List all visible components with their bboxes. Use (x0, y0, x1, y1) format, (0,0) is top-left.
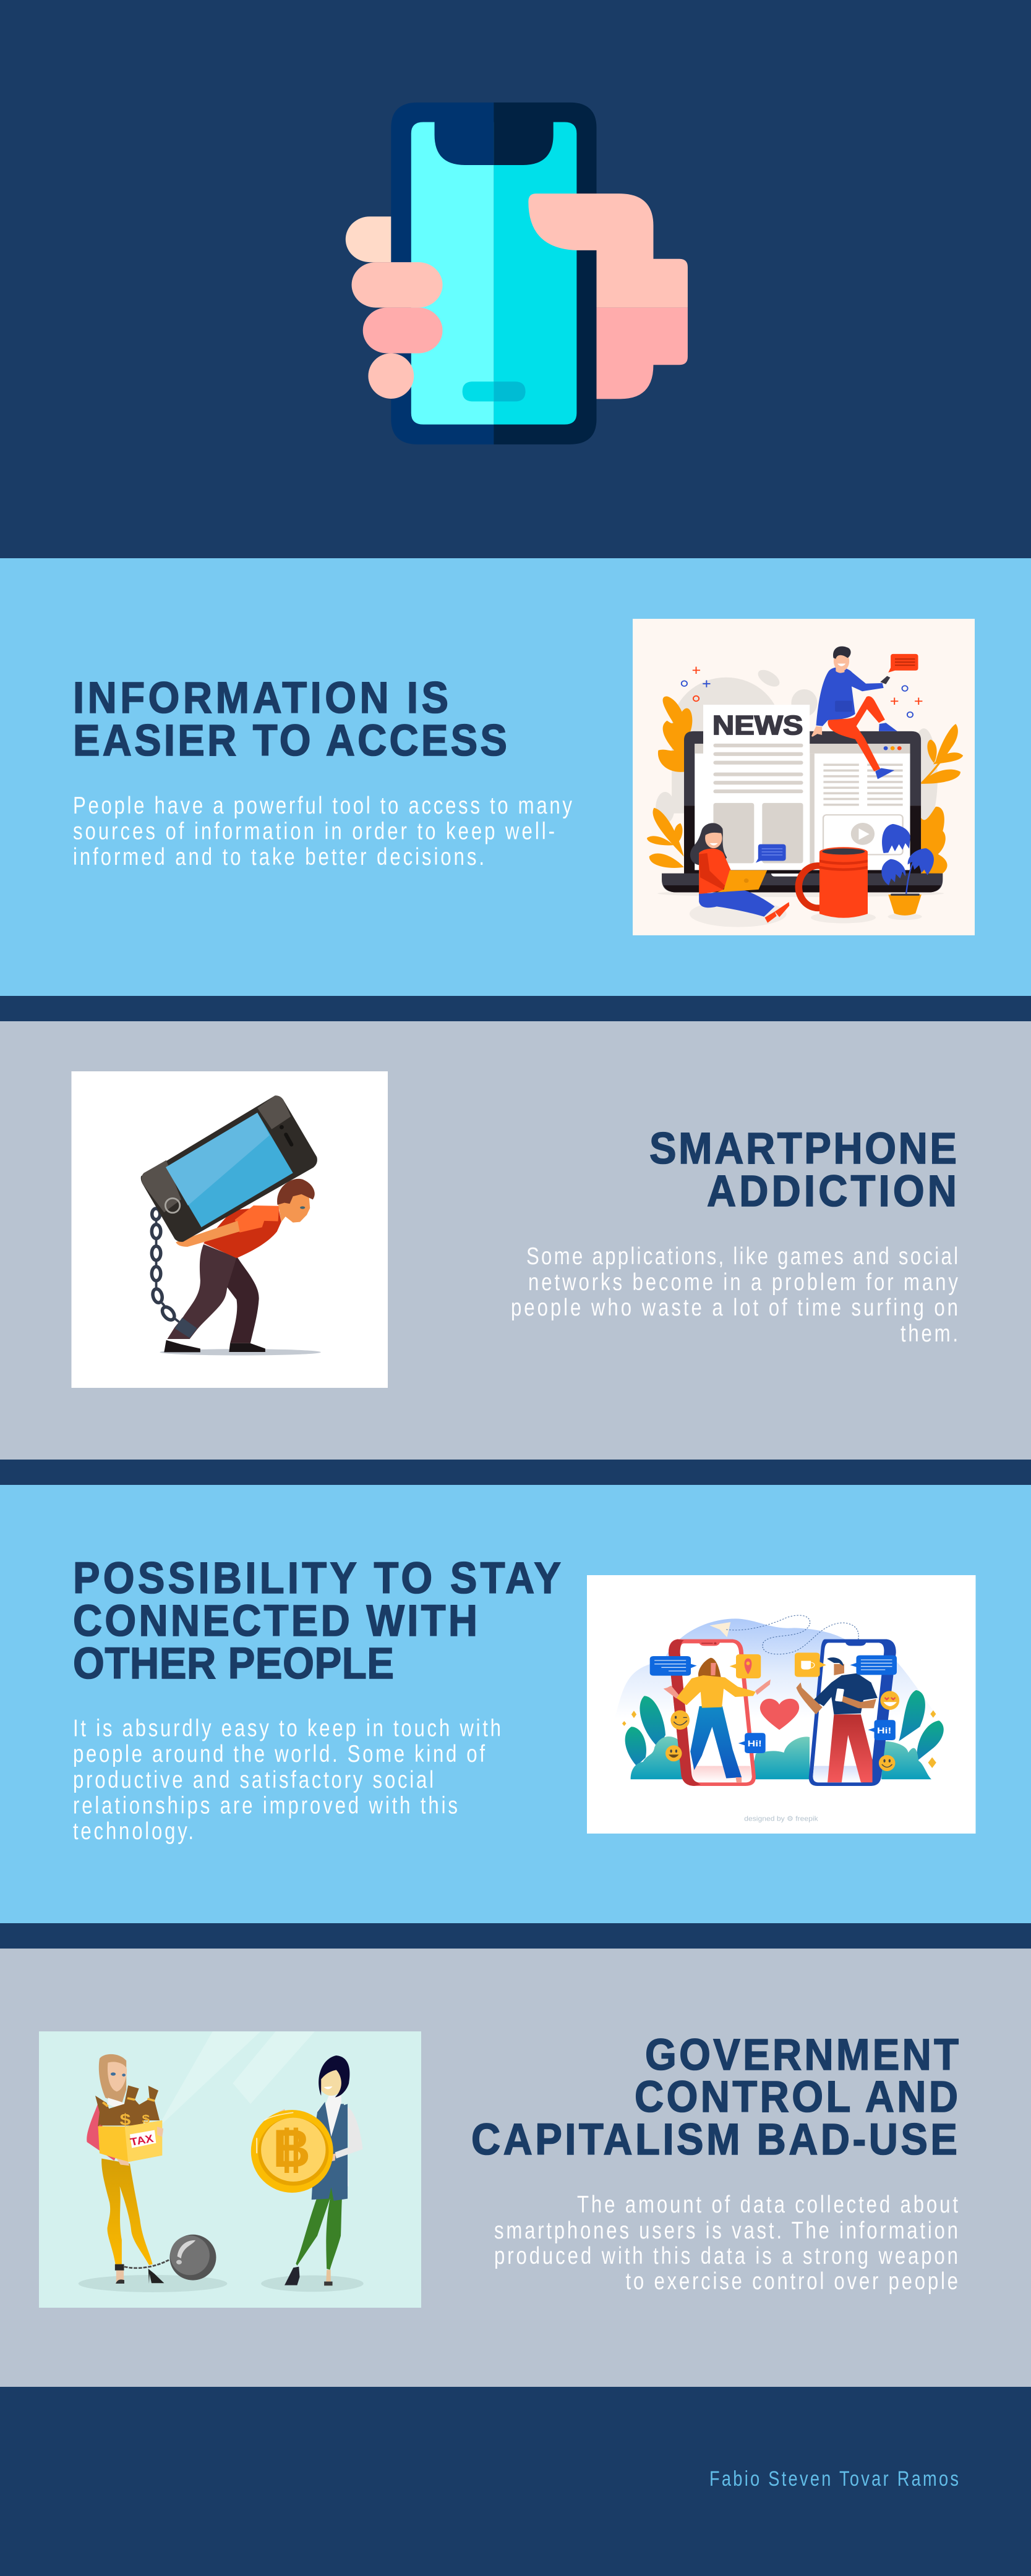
panel: smartphone addiction (0, 1021, 1031, 1460)
notch right (494, 122, 554, 165)
text block: addiction body: people who waste a lot of time surfing on (511, 1294, 958, 1321)
bitcoin coin (251, 2109, 336, 2193)
browser dots (884, 746, 888, 750)
text block: information body: People have a powerful tool to access to many (73, 793, 572, 819)
heading: possibility to stay connected: OTHER PEOPLE (73, 1639, 394, 1688)
heading: government control (471, 2031, 959, 2164)
teal bushes (631, 1736, 931, 1779)
newspaper lines (713, 744, 803, 863)
paper plane (709, 1622, 730, 1637)
heading: information is easier to access: INFORMATION IS (73, 674, 448, 723)
ball and chain (115, 2235, 216, 2281)
text block: information body: sources of information in order to keep well- (73, 818, 555, 844)
arm (176, 1221, 240, 1247)
ground shadows (657, 890, 944, 927)
hi bubbles: Hi! (748, 1739, 762, 1749)
home pill left (463, 381, 494, 401)
thumb and upper palm (528, 193, 688, 308)
woman with tax box: $ (142, 2113, 150, 2125)
woman with tax box (87, 2054, 164, 2284)
woman with tax box: TAX (129, 2133, 155, 2148)
text block: addiction body: Some applications, like games and social (526, 1243, 958, 1270)
illustration card: news (633, 619, 975, 935)
man (796, 1657, 878, 1782)
icon: hand holding smartphone (346, 103, 688, 444)
bitcoin coin: B (273, 2119, 310, 2179)
red phone (669, 1639, 756, 1786)
heading: possibility to stay connected (73, 1554, 561, 1688)
illustration: news on laptop (647, 647, 963, 927)
phone body right half (494, 103, 596, 444)
laptop lid lower (684, 806, 921, 874)
orange leaves (647, 696, 963, 874)
illustration: two people on phones (615, 1615, 944, 1822)
red speech bubble (888, 654, 918, 673)
panel: information access (0, 558, 1031, 996)
text block: information body: informed and to take better decisions. (73, 844, 484, 870)
phone screen left half (411, 122, 494, 425)
light beams (157, 2031, 315, 2128)
text block: connected body: relationships are improved with this (73, 1792, 458, 1819)
little finger (368, 353, 414, 399)
newspaper (703, 705, 810, 869)
chain (152, 1209, 179, 1322)
heading: possibility to stay connected: CONNECTED WITH (73, 1597, 477, 1646)
phone body left half (391, 103, 494, 444)
laptop lid upper (684, 731, 921, 806)
text block: information body (73, 793, 572, 870)
notch left (435, 122, 494, 165)
potted plant (881, 824, 934, 916)
text block: government body: to exercise control over people (626, 2268, 958, 2295)
shoes (164, 1340, 200, 1352)
shadow (160, 1349, 321, 1356)
lower palm (596, 308, 688, 399)
text block: government body: smartphones users is vast. The information (494, 2217, 958, 2244)
video box (823, 815, 903, 854)
woman with tax box: $ (120, 2111, 130, 2129)
heading: smartphone addiction: SMARTPHONE (649, 1124, 957, 1173)
leg cuff (175, 1318, 197, 1338)
location bubble (730, 1654, 761, 1678)
credit: designed by ⚙ freepik (744, 1815, 818, 1822)
ground shadows (79, 2275, 227, 2292)
torso (203, 1206, 281, 1258)
newspaper title: NEWS (712, 710, 803, 741)
neck and head (278, 1191, 310, 1223)
article lines right (823, 763, 903, 806)
text block: connected body (73, 1715, 501, 1845)
hi bubbles (738, 1720, 896, 1753)
laptop base (662, 874, 943, 893)
illustration: tax and bitcoin women (79, 2031, 364, 2292)
blue speech bubble (756, 844, 786, 863)
phone screen right half (494, 122, 576, 425)
ring finger (363, 308, 443, 353)
text block: government body (494, 2191, 958, 2295)
panel: government control (0, 1949, 1031, 2387)
illustration card: connection (587, 1575, 976, 1834)
woman with laptop (690, 823, 789, 923)
heading: information is easier to access (73, 674, 507, 765)
woman (664, 1658, 771, 1782)
heart (760, 1699, 799, 1730)
heading: government control: GOVERNMENT (645, 2031, 959, 2080)
text block: connected body: productive and satisfactory social (73, 1767, 434, 1793)
heading: smartphone addiction: ADDICTION (707, 1167, 957, 1216)
browser bar (695, 744, 910, 754)
plant leaves (625, 1690, 944, 1766)
panel: staying connected (0, 1485, 1031, 1923)
sleeve (235, 1205, 279, 1233)
front leg (167, 1244, 236, 1339)
man sitting on laptop (811, 647, 897, 779)
text block: connected body: technology. (73, 1818, 194, 1845)
text block: addiction body: networks become in a problem for many (528, 1269, 958, 1296)
illustration: man carrying a giant phone (141, 1095, 321, 1356)
middle finger (352, 262, 443, 308)
screen divider (810, 754, 815, 870)
text block: addiction body (511, 1243, 958, 1347)
coffee bubble (795, 1652, 826, 1677)
illustration card: addiction (72, 1071, 388, 1388)
heading: information is easier to access: EASIER TO ACCESS (73, 716, 507, 765)
laptop opening (771, 874, 801, 877)
sky blob (615, 1618, 939, 1719)
text block: connected body: people around the world. Some kind of (73, 1741, 485, 1767)
heading: smartphone addiction (649, 1124, 957, 1216)
text block: addiction body: them. (901, 1320, 958, 1347)
woman with bitcoin (284, 2055, 363, 2285)
index finger (346, 216, 391, 262)
text block: connected body: It is absurdly easy to keep in touch with (73, 1715, 501, 1741)
blue phone (809, 1639, 896, 1786)
blue bubbles (650, 1656, 897, 1676)
dashed flight path (726, 1615, 858, 1654)
heading: government control: CAPITALISM BAD-USE (471, 2115, 957, 2164)
text block: government body: The amount of data collected about (577, 2191, 958, 2218)
heading: possibility to stay connected: POSSIBILITY TO STAY (73, 1554, 561, 1603)
bubble lines (654, 1660, 892, 1671)
mug (798, 847, 868, 918)
laptop screen (695, 744, 910, 870)
heading: government control: CONTROL AND (635, 2073, 958, 2122)
hi bubbles: Hi! (877, 1726, 891, 1736)
sparkles (622, 1711, 936, 1768)
phone (141, 1095, 317, 1242)
emoji faces (669, 1698, 897, 1767)
text block: government body: produced with this data is a strong weapon (494, 2243, 958, 2269)
decorative sparkles (682, 667, 922, 717)
illustration card: tax and bitcoin (39, 2031, 421, 2308)
play button (851, 823, 875, 845)
back leg (226, 1255, 259, 1343)
footer author: Fabio Steven Tovar Ramos (709, 2467, 959, 2491)
emoji (665, 1691, 899, 1771)
home pill right (494, 381, 526, 401)
